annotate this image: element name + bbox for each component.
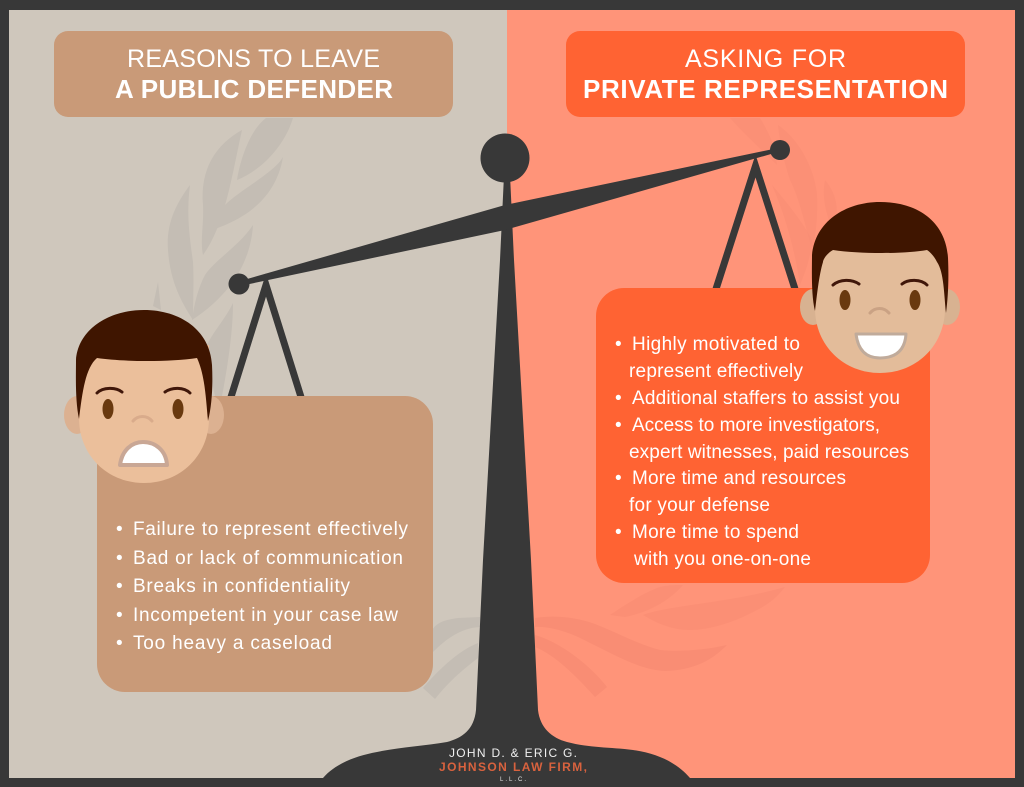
heading text: left: REASONS TO LEAVE bbox=[127, 45, 380, 73]
benefits list: with you one-on-one bbox=[633, 549, 811, 570]
panel: right background bbox=[507, 10, 1015, 778]
reasons list: Breaks in confidentiality bbox=[133, 576, 350, 597]
benefits list: More time to spend bbox=[632, 522, 799, 543]
firm logo: JOHN D. & ERIC G. bbox=[449, 746, 577, 760]
benefits list: • bbox=[615, 522, 622, 543]
scale hanger: right bbox=[716, 166, 795, 289]
icon: happy face bbox=[800, 202, 960, 373]
icon: unhappy face bbox=[64, 310, 224, 483]
benefits list: More time and resources bbox=[632, 468, 846, 489]
reasons list bbox=[116, 519, 408, 654]
laurel wreath watermark: right bbox=[535, 118, 837, 697]
reasons list: Too heavy a caseload bbox=[133, 633, 332, 654]
beam end: left bbox=[228, 274, 250, 294]
heading box: left: A PUBLIC DEFENDER bbox=[115, 74, 393, 104]
heading text: right: ASKING FOR bbox=[685, 45, 846, 73]
panel: left background bbox=[9, 10, 507, 778]
benefits list: expert witnesses, paid resources bbox=[629, 442, 909, 463]
reasons list: Bad or lack of communication bbox=[133, 548, 403, 569]
benefits list: • bbox=[615, 415, 622, 436]
benefits list: • bbox=[615, 468, 622, 489]
scale hanger: left bbox=[231, 285, 301, 397]
reasons list: Incompetent in your case law bbox=[133, 605, 398, 626]
firm logo: JOHNSON LAW FIRM, bbox=[439, 760, 587, 774]
reasons list: Failure to represent effectively bbox=[133, 519, 408, 540]
benefits list: • bbox=[615, 334, 622, 355]
heading box: left bbox=[54, 31, 453, 117]
benefits list: Highly motivated to bbox=[632, 334, 800, 355]
benefits list: • bbox=[615, 388, 622, 409]
benefits list: Access to more investigators, bbox=[632, 415, 880, 436]
beam end: right bbox=[770, 140, 790, 160]
heading box: right: PRIVATE REPRESENTATION bbox=[583, 74, 948, 104]
benefits list: for your defense bbox=[629, 495, 770, 516]
reasons list: • bbox=[116, 519, 123, 540]
scale beam bbox=[240, 148, 778, 286]
reasons list: • bbox=[116, 576, 123, 597]
heading box: right bbox=[566, 31, 965, 117]
reasons list: • bbox=[116, 633, 123, 654]
scale top knob bbox=[480, 134, 530, 182]
reasons list: • bbox=[116, 605, 123, 626]
benefits list: represent effectively bbox=[629, 361, 804, 382]
firm logo: L.L.C. bbox=[500, 777, 526, 783]
reasons list: • bbox=[116, 548, 123, 569]
panel: private representation benefits bbox=[596, 288, 930, 583]
scale stand bbox=[323, 175, 690, 778]
laurel wreath watermark: left bbox=[153, 118, 480, 699]
firm logo bbox=[439, 746, 587, 783]
benefits list: Additional staffers to assist you bbox=[632, 388, 900, 409]
panel: public defender reasons bbox=[97, 396, 433, 692]
benefits list bbox=[615, 334, 909, 570]
